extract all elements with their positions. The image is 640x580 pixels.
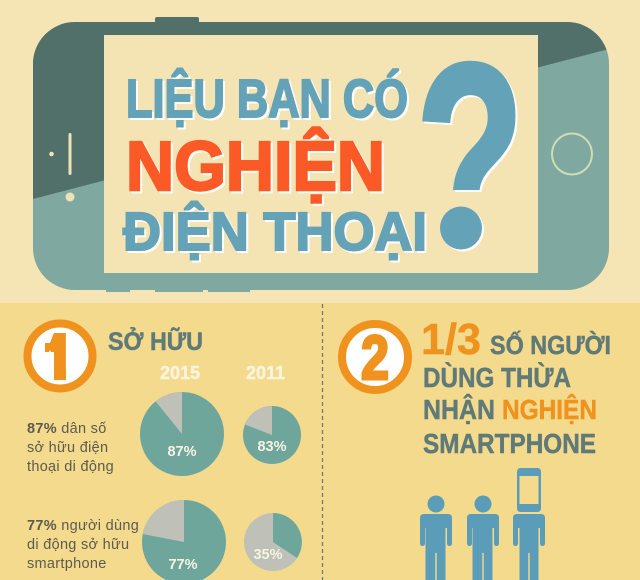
text: mobile ownership: thoại di động xyxy=(27,459,114,475)
text: smartphone ownership: 77% người dùng xyxy=(27,518,139,534)
text: smartphone ownership: di động sở hữu xyxy=(27,537,129,553)
section divider xyxy=(322,304,324,580)
pie: 87% in 2015: 87% xyxy=(167,444,197,460)
pie: 83% in 2011 xyxy=(243,406,301,464)
year labels: 2015 xyxy=(160,363,200,383)
phone illustration xyxy=(33,17,609,292)
home button xyxy=(552,134,592,174)
icon: person 1 xyxy=(420,496,452,580)
phone side details xyxy=(49,133,74,202)
question mark: ? xyxy=(416,9,524,306)
pie: 83% in 2011: 83% xyxy=(257,439,287,455)
title line 3: ĐIỆN THOẠI xyxy=(123,201,427,262)
title line 2: NGHIỆN xyxy=(126,126,385,205)
heading: NGHIỆN xyxy=(502,394,597,425)
pie: 87% in 2015 xyxy=(140,392,224,476)
badge 2 xyxy=(342,324,408,393)
heading xyxy=(421,315,611,459)
title xyxy=(122,60,518,262)
heading: DÙNG THỪA xyxy=(423,362,571,393)
text: mobile ownership: sở hữu điện xyxy=(27,440,108,456)
phone screen xyxy=(104,35,538,273)
badge 1: 1 xyxy=(42,318,72,396)
pie: 77% in 2015: 77% xyxy=(168,557,198,573)
year labels xyxy=(160,363,285,383)
question mark xyxy=(422,60,518,252)
text: smartphone ownership: smartphone xyxy=(27,556,107,572)
text: mobile ownership: 87% dân số xyxy=(27,421,107,437)
lower background xyxy=(0,303,640,580)
heading: SỐ NGƯỜI xyxy=(490,330,611,360)
pie: 77% in 2015 xyxy=(142,500,226,580)
badge 1 xyxy=(28,318,92,396)
title line 1: LIỆU BẠN CÓ xyxy=(126,68,408,129)
heading: SMARTPHONE xyxy=(423,428,596,459)
pie: 35% in 2011 xyxy=(244,513,302,571)
pie: 35% in 2011: 35% xyxy=(253,547,283,563)
year labels: 2011 xyxy=(246,363,285,383)
heading: 1/3 xyxy=(421,315,481,364)
heading: NHẬN xyxy=(423,394,495,425)
heading: SỞ HỮU xyxy=(108,326,203,356)
badge 2: 2 xyxy=(361,324,389,393)
panel: addiction xyxy=(342,315,611,580)
icon: person with phone head xyxy=(513,468,545,580)
panel: ownership xyxy=(27,318,302,580)
icon: person 2 xyxy=(467,496,499,580)
